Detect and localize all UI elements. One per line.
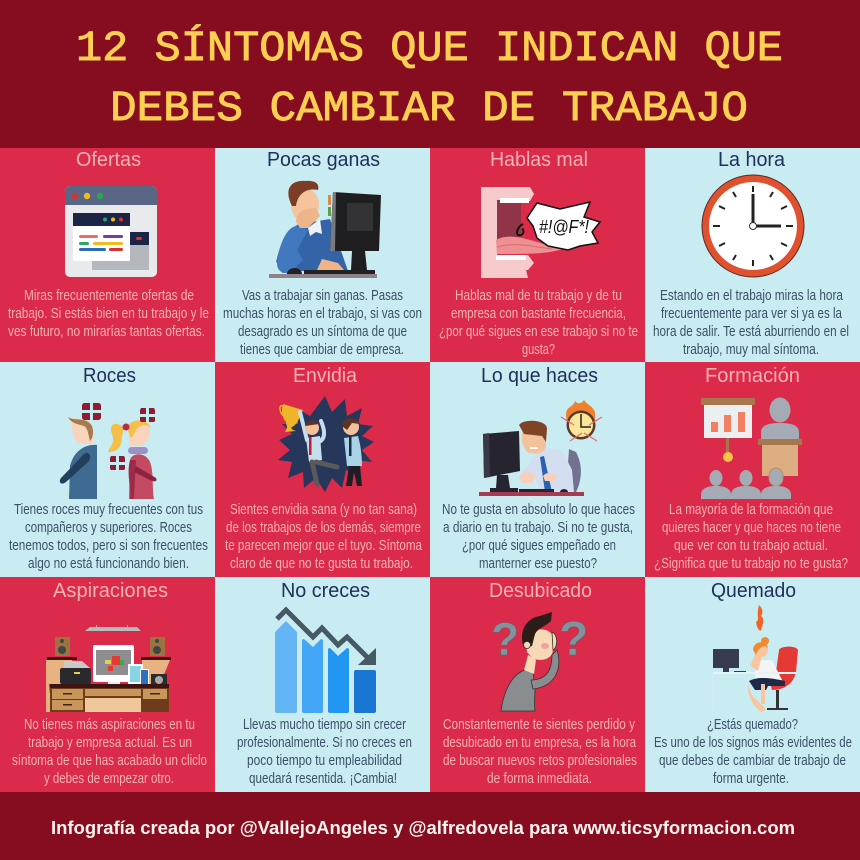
text: Desubicado: de forma inmediata. — [487, 771, 592, 787]
panel: No creces — [215, 577, 430, 792]
heading: La hora: La hora — [718, 149, 786, 171]
text: Quemado: ¿Estás quemado? — [707, 717, 798, 733]
text: Roces: algo no está funcionando bien. — [28, 556, 189, 572]
text: Hablas mal — [439, 288, 638, 358]
icon: training presentation — [701, 398, 802, 499]
title: DEBES CAMBIAR DE TRABAJO — [110, 84, 748, 133]
panel: Formación — [645, 362, 860, 577]
text: Hablas mal: Hablas mal de tu trabajo y de tu — [455, 288, 622, 304]
icon: wall clock — [702, 175, 804, 277]
text: Lo que haces: a diario en tu trabajo. Si no te gusta, — [443, 520, 633, 536]
text: Envidia — [225, 502, 423, 572]
text: No creces: profesionalmente. Si no creces en — [237, 735, 412, 751]
text: Envidia: claro de que no te gusta tu trabajo. — [230, 556, 413, 572]
heading: No creces: No creces — [281, 580, 370, 602]
text: Hablas mal: ¿por qué sigues en ese trabajo si no te — [439, 324, 638, 340]
text: Desubicado — [443, 717, 637, 787]
icon: tired man at computer — [269, 181, 381, 278]
icon: confused man with question marks: ? — [491, 613, 519, 665]
panel: La hora — [645, 148, 860, 362]
panel: Lo que haces — [430, 362, 645, 577]
heading: Roces: Roces — [83, 365, 136, 387]
text: Pocas ganas: muchas horas en el trabajo, si vas con — [223, 306, 422, 322]
icon: shouting mouth — [481, 187, 600, 278]
text: Lo que haces: manterner ese puesto? — [479, 556, 597, 572]
heading: Formación: Formación — [705, 365, 800, 387]
text: Aspiraciones: y debes de empezar otro. — [44, 771, 174, 787]
panel: Desubicado — [430, 577, 645, 792]
title: 12 SÍNTOMAS QUE INDICAN QUE — [76, 24, 783, 73]
chart: falling bars with arrow — [275, 610, 376, 713]
heading: Ofertas: Ofertas — [76, 149, 141, 171]
icon: office desk — [46, 625, 171, 712]
panel: Ofertas — [0, 148, 215, 362]
icon: envy starburst with trophy — [278, 396, 374, 492]
text: No creces: poco tiempo tu empleabilidad — [247, 753, 402, 769]
text: Quemado: forma urgente. — [713, 771, 789, 787]
text: Pocas ganas: Vas a trabajar sin ganas. Pasas — [242, 288, 403, 304]
icon: confused man with question marks: ? — [559, 613, 588, 666]
panel: Aspiraciones — [0, 577, 215, 792]
icon: burned-out woman at desk — [713, 605, 798, 712]
icon: confused man with question marks — [491, 612, 588, 711]
heading: Lo que haces: Lo que haces — [481, 365, 598, 387]
text: Roces — [9, 502, 208, 572]
panel: Hablas mal — [430, 148, 645, 362]
panel: Envidia — [215, 362, 430, 577]
panel: Pocas ganas — [215, 148, 430, 362]
text: Lo que haces: No te gusta en absoluto lo que haces — [442, 502, 635, 518]
text: Aspiraciones — [12, 717, 207, 787]
text: No creces: quedará resentida. ¡Cambia! — [249, 771, 397, 787]
text: Envidia: Sientes envidia sana (y no tan sana) — [230, 502, 417, 518]
text: Envidia: de los trabajos de los demás, siempre — [226, 520, 421, 536]
text: Aspiraciones: No tienes más aspiraciones en tu — [24, 717, 195, 733]
text: Formación: que ver con tu trabajo actual. — [674, 538, 828, 554]
text: Roces: compañeros y superiores. Roces — [25, 520, 192, 536]
panel: Quemado — [645, 577, 860, 792]
heading: Hablas mal: Hablas mal — [490, 149, 588, 171]
heading: Aspiraciones: Aspiraciones — [53, 580, 168, 602]
panel: Roces — [0, 362, 215, 577]
text: Ofertas — [8, 288, 209, 340]
text: Ofertas: trabajo. Si estás bien en tu trabajo y le — [8, 306, 209, 322]
text: Desubicado: desubicado en tu empresa, es la hora — [443, 735, 637, 751]
text: La hora — [653, 288, 849, 358]
text: Envidia: te parecen mejor que el tuyo. Síntoma — [225, 538, 423, 554]
title — [76, 24, 783, 133]
text: Pocas ganas: desagrado es un síntoma de que — [238, 324, 407, 340]
icon: browser window — [65, 186, 157, 277]
heading: Envidia: Envidia — [293, 365, 358, 387]
text: Aspiraciones: síntoma de que has acabado un cliclo — [12, 753, 207, 769]
text: La hora: trabajo, muy mal síntoma. — [683, 342, 819, 358]
text: Lo que haces — [442, 502, 635, 572]
heading: Desubicado: Desubicado — [489, 580, 592, 602]
text: No creces: Llevas mucho tiempo sin crecer — [243, 717, 406, 733]
text: Lo que haces: ¿por qué sigues empeñado en — [462, 538, 616, 554]
text: Pocas ganas — [223, 288, 422, 358]
text: Roces: Tienes roces muy frecuentes con tus — [14, 502, 203, 518]
text: Ofertas: ves futuro, no mirarías tantas ofertas. — [8, 324, 205, 340]
text: Desubicado: Constantemente te sientes perdido y — [443, 717, 636, 733]
text: Hablas mal: gusta? — [522, 342, 555, 358]
text: No creces — [237, 717, 412, 787]
text: Pocas ganas: tienes que cambiar de empresa. — [240, 342, 404, 358]
icon: two people arguing — [60, 403, 157, 499]
text: Quemado — [654, 717, 852, 787]
text: Hablas mal: empresa con bastante frecuencia, — [451, 306, 626, 322]
text: Desubicado: de buscar nuevos retos profesionales — [443, 753, 637, 769]
text: Formación — [654, 502, 848, 572]
heading: Pocas ganas: Pocas ganas — [267, 149, 380, 171]
text: Roces: tenemos todos, pero si son frecuentes — [9, 538, 208, 554]
text: Aspiraciones: trabajo y empresa actual. Es un — [28, 735, 192, 751]
icon: shouting mouth: #!@F*! — [539, 217, 589, 237]
icon: angry worker with burning clock — [479, 400, 602, 496]
heading: Quemado: Quemado — [711, 580, 796, 602]
footer credit: Infografía creada por @VallejoAngeles y @alfredovela para www.ticsyformacion.com — [51, 818, 795, 838]
text: Ofertas: Miras frecuentemente ofertas de — [24, 288, 194, 304]
